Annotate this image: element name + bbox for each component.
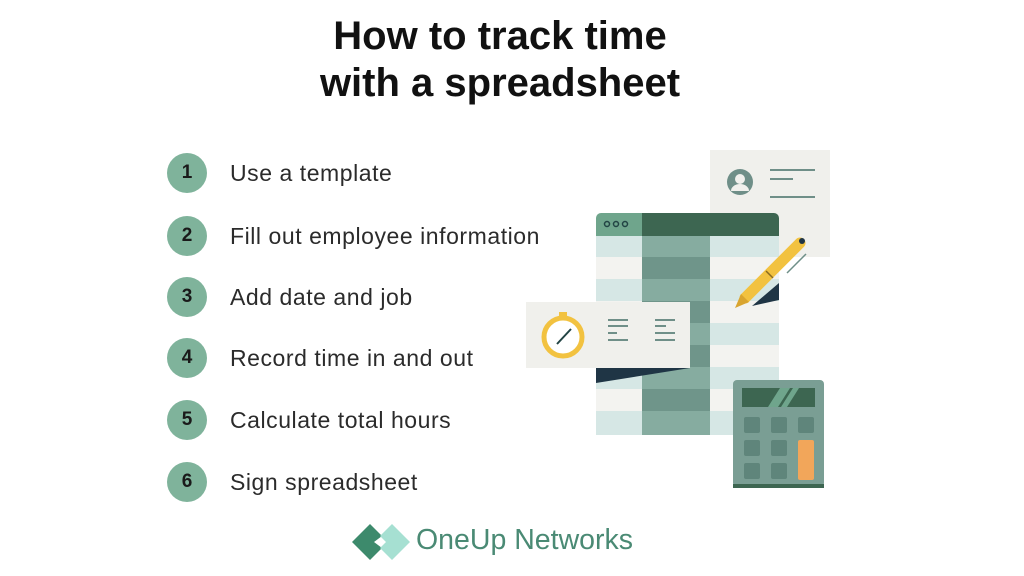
step 4: 4 — [182, 347, 192, 368]
step 4: Record time in and out — [230, 345, 474, 371]
logo icon — [352, 524, 410, 560]
step 1: 1 — [182, 162, 192, 183]
profile card — [710, 150, 830, 257]
step 3 — [167, 277, 413, 317]
step 2: 2 — [182, 225, 192, 246]
pen — [735, 238, 806, 308]
step 1 — [167, 153, 392, 193]
spreadsheet — [596, 213, 779, 435]
step 5 — [167, 400, 451, 440]
step 1: Use a template — [230, 160, 392, 186]
step 5: 5 — [182, 409, 192, 430]
step 2 — [167, 216, 540, 256]
title: How to track time — [333, 14, 667, 58]
logo — [352, 524, 633, 560]
step 6: Sign spreadsheet — [230, 469, 418, 495]
logo text: OneUp Networks — [416, 524, 633, 556]
step 3: Add date and job — [230, 284, 413, 310]
step 6: 6 — [182, 471, 192, 492]
title — [320, 14, 680, 105]
title: with a spreadsheet — [320, 61, 680, 105]
step 2: Fill out employee information — [230, 223, 540, 249]
stopwatch card — [526, 302, 690, 383]
calculator — [733, 380, 824, 488]
step 4 — [167, 338, 474, 378]
step 6 — [167, 462, 418, 502]
step 3: 3 — [182, 286, 192, 307]
step 5: Calculate total hours — [230, 407, 451, 433]
